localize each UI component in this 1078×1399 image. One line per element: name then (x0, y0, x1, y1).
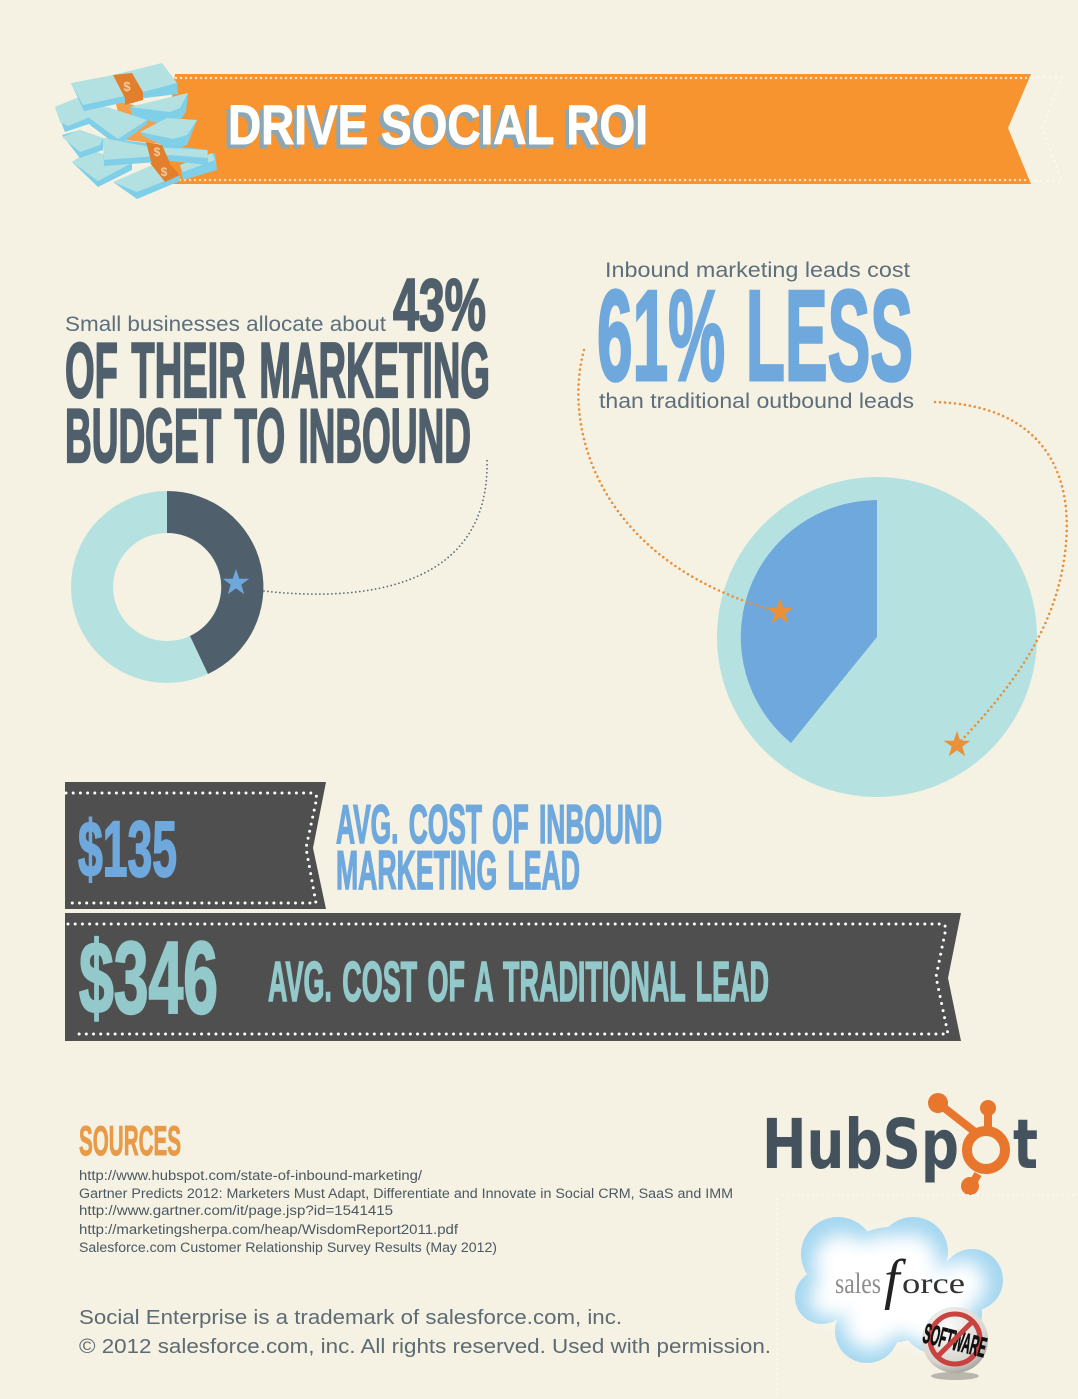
icon: stack of money (55, 63, 217, 199)
text block: 43% of marketing budget: BUDGET TO INBOUND (65, 394, 471, 479)
icon: stack of money: $ (154, 145, 161, 159)
infographic canvas: SOFTWARE (920, 1318, 990, 1363)
icon: orange star inbound (767, 598, 793, 623)
header ribbon (160, 74, 1062, 184)
text block: source list (79, 1168, 733, 1255)
text block: 61% less: Inbound marketing leads cost (605, 259, 910, 282)
banner: $135 inbound lead: $135 (78, 804, 177, 893)
banner: $346 traditional lead (65, 913, 961, 1041)
logo: salesforce cloud: orce (902, 1267, 965, 1300)
heading: avg cost of inbound lead: MARKETING LEAD (336, 839, 580, 901)
logo: salesforce cloud: sales (835, 1267, 881, 1300)
logo: salesforce cloud (795, 1217, 1003, 1363)
icon: blue star (223, 569, 249, 594)
title: DRIVE SOCIAL ROI (224, 97, 644, 160)
icon: no software badge (920, 1307, 990, 1380)
infographic canvas: OF THEIR MARKETING (65, 326, 490, 414)
title: DRIVE SOCIAL ROI (228, 93, 648, 156)
text block: trademark notice: Social Enterprise is a trademark of salesforce.com, inc. (79, 1307, 622, 1329)
logo: HubSpot: t (1013, 1105, 1038, 1185)
text block: 43% of marketing budget: Small businesses allocate about (65, 313, 386, 336)
text block: 43% of marketing budget (65, 265, 490, 479)
text block: source list: http://www.hubspot.com/state-of-inbound-marketing/ (79, 1168, 422, 1183)
text block: source list: http://www.gartner.com/it/page.jsp?id=1541415 (79, 1203, 393, 1218)
banner: $135 inbound lead (65, 782, 326, 909)
infographic canvas: AVG. COST OF INBOUND (336, 793, 662, 855)
pie chart: inbound vs outbound cost (717, 477, 1037, 797)
text block: source list: http://marketingsherpa.com/heap/WisdomReport2011.pdf (79, 1222, 458, 1237)
text block: trademark notice (79, 1307, 771, 1358)
text block: 61% less: than traditional outbound leads (599, 390, 914, 413)
heading: avg cost of inbound lead (336, 793, 662, 901)
logo: HubSpot: HubSp (762, 1105, 959, 1185)
icon: orange star outbound (944, 731, 970, 756)
dotted connectors: pie to text (578, 350, 1067, 745)
text block: 43% of marketing budget: 43% (393, 265, 486, 346)
text block: source list: Salesforce.com Customer Relationship Survey Results (May 2012) (79, 1240, 497, 1255)
dotted connector: donut to heading (264, 460, 487, 594)
text block: source list: Gartner Predicts 2012: Marketers Must Adapt, Differentiate and Innovate in Social CRM, SaaS and IMM (79, 1186, 733, 1201)
faint dotted frame around salesforce logo (777, 1195, 1078, 1399)
banner: $346 traditional lead: $346 (79, 921, 218, 1035)
donut chart: 43% (92, 491, 263, 674)
infographic canvas: SOURCES (79, 1117, 181, 1164)
icon: stack of money: $ (123, 79, 131, 94)
icon: stack of money: $ (161, 165, 168, 179)
text block: 61% less (597, 259, 914, 413)
logo: salesforce cloud: f (884, 1249, 907, 1311)
text block: trademark notice: © 2012 salesforce.com, inc. All rights reserved. Used with permission. (79, 1336, 771, 1358)
